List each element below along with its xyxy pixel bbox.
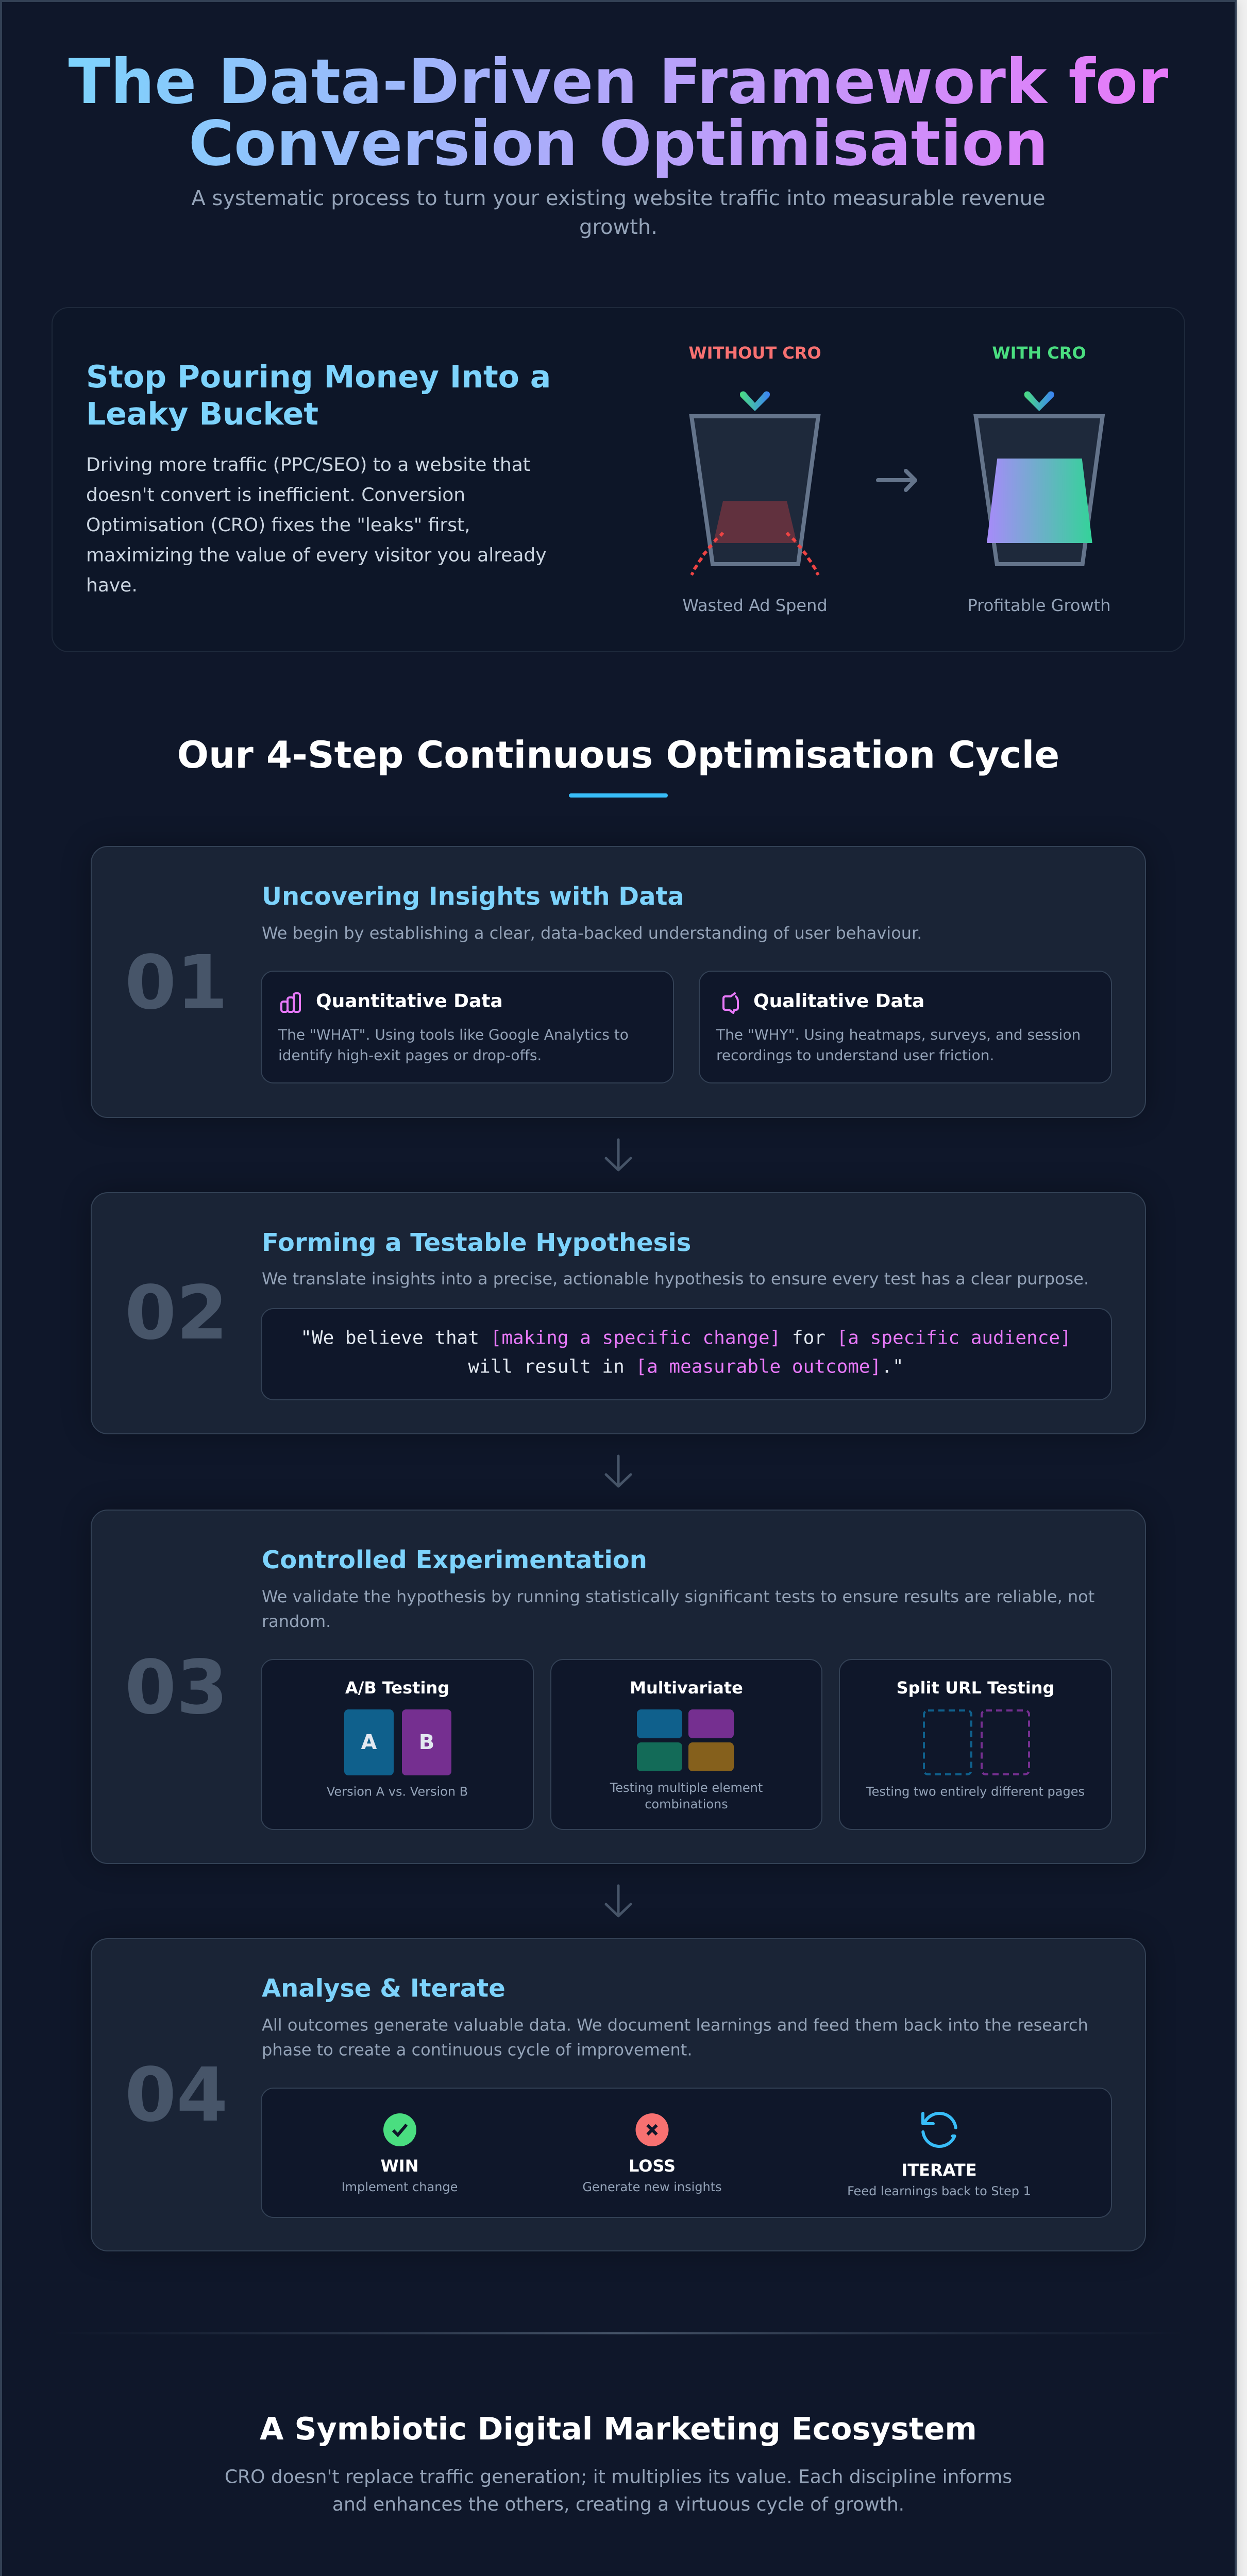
icon: bar chart xyxy=(281,993,300,1012)
arrow: step 1 to 2 xyxy=(606,1140,631,1170)
step 4 title: Analyse & Iterate xyxy=(262,1974,505,2003)
text block: leaky bucket explanation xyxy=(86,454,547,596)
heading: 4-step cycle: Our 4-Step Continuous Optimisation Cycle xyxy=(177,733,1059,776)
heading: ecosystem: A Symbiotic Digital Marketing Ecosystem xyxy=(260,2411,977,2447)
card text: The "WHY". Using heatmaps, surveys, and session xyxy=(716,1026,1081,1043)
panel: step 1 xyxy=(91,846,1145,1117)
hypothesis statement box: "We believe that [making a specific change] for [a specific audience] xyxy=(300,1327,1071,1349)
step 2 description: We translate insights into a precise, actionable hypothesis to ensure every test has a clear purpose. xyxy=(262,1269,1089,1289)
card text xyxy=(716,1026,1081,1064)
split page outlines xyxy=(924,1710,1029,1774)
card title: Qualitative Data xyxy=(753,991,924,1012)
step 1 title: Uncovering Insights with Data xyxy=(262,882,684,911)
outcome: win xyxy=(342,2113,458,2194)
outcome: loss: LOSS xyxy=(629,2156,676,2176)
card text: recordings to understand user friction. xyxy=(716,1047,994,1064)
card: multivariate: Testing multiple element xyxy=(610,1781,763,1795)
outcome: iterate: ITERATE xyxy=(901,2160,977,2180)
title: The Data-Driven Framework for xyxy=(69,46,1168,118)
card: multivariate: Multivariate xyxy=(630,1678,743,1698)
step 4 description xyxy=(262,2015,1088,2060)
card: qualitative data xyxy=(699,971,1111,1083)
subtitle: A systematic process to turn your existing website traffic into measurable revenue xyxy=(191,187,1046,210)
panel: step 3 xyxy=(91,1510,1145,1863)
card: A/B testing: A/B Testing xyxy=(345,1678,449,1698)
outcome: iterate xyxy=(847,2113,1031,2198)
card text: The "WHAT". Using tools like Google Analytics to xyxy=(278,1026,629,1043)
outcome: win: Implement change xyxy=(342,2180,458,2194)
bucket outline xyxy=(976,416,1103,564)
text block: ecosystem intro: and enhances the others, creating a virtuous cycle of growth. xyxy=(332,2494,904,2515)
leak drips xyxy=(692,533,818,575)
step 4 description: All outcomes generate valuable data. We document learnings and feed them back into the research xyxy=(262,2015,1088,2035)
step 1 description: We begin by establishing a clear, data-backed understanding of user behaviour. xyxy=(262,923,922,943)
panel: step 4 xyxy=(91,1939,1145,2251)
outcome: loss: Generate new insights xyxy=(582,2180,722,2194)
card: quantitative data xyxy=(261,971,673,1083)
heading: leaky bucket xyxy=(86,359,551,432)
step number 02: 02 xyxy=(125,1269,228,1356)
outcomes box xyxy=(261,2088,1111,2217)
diagram: without CRO bucket: WITHOUT CRO xyxy=(688,343,821,363)
card title: Quantitative Data xyxy=(316,991,503,1012)
subtitle xyxy=(191,187,1046,239)
step number 04: 04 xyxy=(125,2052,228,2138)
text block: leaky bucket explanation: Driving more traffic (PPC/SEO) to a website that xyxy=(86,454,530,476)
diagram: with CRO bucket: Profitable Growth xyxy=(968,596,1110,615)
card: multivariate xyxy=(551,1659,822,1829)
step 4 description: phase to create a continuous cycle of improvement. xyxy=(262,2040,693,2060)
outcome: loss xyxy=(582,2113,722,2194)
heading: leaky bucket: Stop Pouring Money Into a xyxy=(86,359,551,395)
step 3 description: We validate the hypothesis by running statistically significant tests to ensure results are reliable, not xyxy=(262,1587,1094,1606)
outcome: iterate: Feed learnings back to Step 1 xyxy=(847,2184,1031,2198)
title xyxy=(69,46,1168,180)
card text: identify high-exit pages or drop-offs. xyxy=(278,1047,542,1064)
text block: leaky bucket explanation: have. xyxy=(86,575,138,596)
hypothesis statement box: will result in [a measurable outcome]." xyxy=(468,1356,904,1378)
subtitle: growth. xyxy=(579,215,658,239)
step 3 description xyxy=(262,1587,1094,1631)
step 3 description: random. xyxy=(262,1612,331,1631)
card text xyxy=(278,1026,629,1064)
panel: step 2 xyxy=(91,1193,1145,1434)
text block: leaky bucket explanation: maximizing the value of every visitor you already xyxy=(86,545,547,566)
card: multivariate: combinations xyxy=(645,1797,728,1811)
diagram: without CRO bucket xyxy=(682,343,828,615)
bucket outline xyxy=(692,416,818,564)
icon: speech bubble xyxy=(723,993,738,1013)
leaking water level xyxy=(713,501,797,543)
hypothesis statement box xyxy=(261,1309,1111,1400)
step number 01: 01 xyxy=(125,939,228,1026)
card: split URL testing: Split URL Testing xyxy=(897,1678,1054,1698)
panel: leaky bucket intro xyxy=(52,308,1185,652)
text block: leaky bucket explanation: Optimisation (CRO) fixes the "leaks" first, xyxy=(86,515,470,536)
outcome: win: WIN xyxy=(381,2156,418,2176)
icon: funnel chevron xyxy=(1024,392,1054,411)
variant A: A xyxy=(361,1731,377,1754)
full water level xyxy=(987,459,1092,543)
multivariate tiles xyxy=(637,1709,734,1771)
step number 03: 03 xyxy=(125,1644,228,1731)
arrow: step 3 to 4 xyxy=(606,1886,631,1916)
diagram: with CRO bucket xyxy=(968,343,1110,615)
arrow: step 2 to 3 xyxy=(606,1456,631,1486)
variant A xyxy=(344,1709,394,1775)
text block: ecosystem intro xyxy=(225,2467,1012,2515)
text block: leaky bucket explanation: doesn't convert is inefficient. Conversion xyxy=(86,484,465,506)
arrow: without to with xyxy=(878,471,915,490)
icon: funnel chevron xyxy=(740,392,770,411)
card: split URL testing xyxy=(839,1659,1111,1829)
variant B xyxy=(402,1709,451,1775)
card: split URL testing: Testing two entirely different pages xyxy=(866,1785,1085,1799)
card: A/B testing: Version A vs. Version B xyxy=(327,1785,468,1799)
card: A/B testing xyxy=(261,1659,533,1829)
diagram: with CRO bucket: WITH CRO xyxy=(992,343,1086,363)
heading: 4-step cycle xyxy=(177,733,1059,798)
heading: leaky bucket: Leaky Bucket xyxy=(86,396,318,432)
step 3 title: Controlled Experimentation xyxy=(262,1546,647,1574)
variant B: B xyxy=(419,1731,434,1754)
diagram: without CRO bucket: Wasted Ad Spend xyxy=(682,596,828,615)
step 2 title: Forming a Testable Hypothesis xyxy=(262,1228,691,1257)
text block: ecosystem intro: CRO doesn't replace traffic generation; it multiplies its value. Each discipline informs xyxy=(225,2467,1012,2487)
title: Conversion Optimisation xyxy=(189,108,1048,180)
